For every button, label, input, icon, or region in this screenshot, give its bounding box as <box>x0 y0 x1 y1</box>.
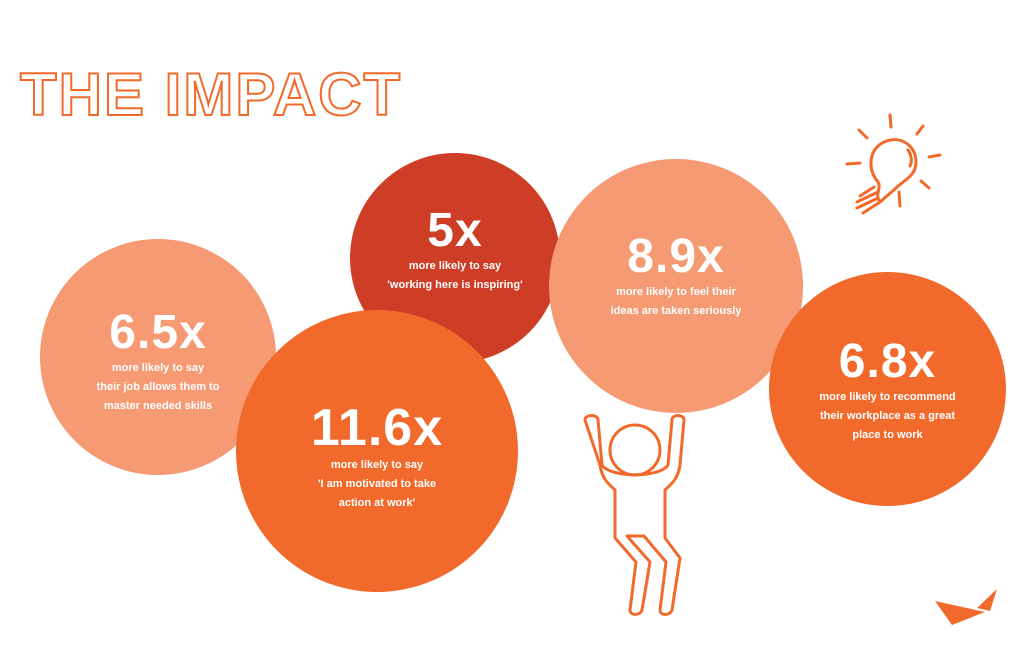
circle: 6.8x: 6.8x <box>839 335 936 388</box>
circle: 6.5x: more likely to say <box>112 362 204 374</box>
circle: 11.6x: more likely to say <box>331 459 423 471</box>
circle: 5x <box>350 153 560 363</box>
circle: 6.8x <box>769 272 1006 506</box>
circle: 11.6x: 11.6x <box>311 399 443 457</box>
circle: 6.8x: their workplace as a great <box>820 410 955 422</box>
circle: 6.5x <box>40 239 276 475</box>
circle: 6.8x: place to work <box>852 429 923 441</box>
circle: 5x: 'working here is inspiring' <box>387 279 523 291</box>
circle: 6.8x: more likely to recommend <box>819 391 956 403</box>
circle: 11.6x <box>236 310 518 592</box>
circle: 5x: more likely to say <box>409 260 501 272</box>
circle: 11.6x: action at work' <box>339 497 415 509</box>
icon: light bulb <box>846 114 942 215</box>
circle: 8.9x: 8.9x <box>627 230 725 283</box>
circle: 8.9x: more likely to feel their <box>616 286 736 298</box>
circle: 8.9x <box>549 159 803 413</box>
title: THE IMPACT <box>20 61 402 128</box>
circle: 6.5x: their job allows them to <box>97 381 219 393</box>
circle: 6.5x: master needed skills <box>104 400 212 412</box>
logo <box>935 589 997 625</box>
circle: 11.6x: 'I am motivated to take <box>318 478 436 490</box>
icon: person cheering <box>584 414 686 616</box>
circle: 5x: 5x <box>427 204 483 257</box>
circle: 6.5x: 6.5x <box>109 306 207 359</box>
circle: 8.9x: ideas are taken seriously <box>611 305 741 317</box>
